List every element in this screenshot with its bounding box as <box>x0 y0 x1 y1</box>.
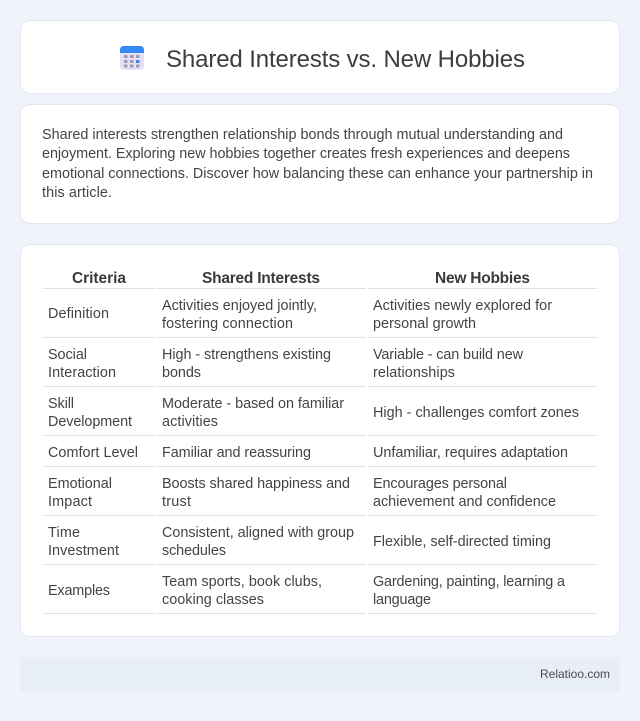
row: skill development: activities <box>162 414 218 430</box>
row: time investment: Time <box>48 525 80 541</box>
row: comfort level: Familiar and reassuring <box>162 445 311 461</box>
row: definition: Definition <box>48 306 109 322</box>
row: examples: Gardening, painting, learning a <box>373 574 565 590</box>
row: emotional impact: Boosts shared happiness and <box>162 476 350 492</box>
row: time investment: schedules <box>162 543 226 559</box>
row: social interaction: Social <box>48 347 87 363</box>
row: comfort level: Comfort Level <box>48 445 138 461</box>
row: emotional impact: Emotional <box>48 476 112 492</box>
row: skill development: Development <box>48 414 132 430</box>
text block: introduction: Shared interests strengthen relationship bonds through mutual understanding and <box>42 127 563 143</box>
table header: Criteria <box>72 270 126 287</box>
row: emotional impact: trust <box>162 494 191 510</box>
row: social interaction: bonds <box>162 365 201 381</box>
table header <box>72 270 530 287</box>
row: skill development <box>48 396 579 430</box>
footer <box>20 657 620 691</box>
title: Shared Interests vs. New Hobbies <box>166 46 525 73</box>
row: examples: cooking classes <box>162 592 264 608</box>
row: emotional impact: Impact <box>48 494 92 510</box>
text block: introduction <box>42 127 593 201</box>
row: time investment <box>48 525 551 559</box>
table header: New Hobbies <box>435 270 530 287</box>
footer: Relatioo.com <box>540 667 610 681</box>
row: definition: personal growth <box>373 316 476 332</box>
icon: calendar <box>120 46 144 70</box>
row: examples <box>48 574 565 608</box>
row: social interaction: High - strengthens existing <box>162 347 331 363</box>
row: social interaction: Variable - can build new <box>373 347 524 363</box>
row: time investment: Consistent, aligned with group <box>162 525 354 541</box>
row: definition <box>48 298 552 332</box>
panel: title card <box>20 20 620 94</box>
row: time investment: Investment <box>48 543 119 559</box>
row: social interaction <box>48 347 524 381</box>
row: definition: fostering connection <box>162 316 293 332</box>
row: skill development: Moderate - based on familiar <box>162 396 344 412</box>
row: examples: Team sports, book clubs, <box>162 574 322 590</box>
row: comfort level: Unfamiliar, requires adaptation <box>373 445 568 461</box>
row: definition: Activities newly explored for <box>373 298 552 314</box>
row: social interaction: relationships <box>373 365 455 381</box>
row: examples: language <box>373 592 431 608</box>
row: comfort level <box>48 445 568 461</box>
row: emotional impact: Encourages personal <box>373 476 507 492</box>
row: emotional impact: achievement and confidence <box>373 494 556 510</box>
row: emotional impact <box>48 476 556 510</box>
row: skill development: High - challenges comfort zones <box>373 405 579 421</box>
text block: introduction: enjoyment. Exploring new hobbies together creates fresh experiences and deepens <box>42 146 570 162</box>
row: examples: Examples <box>48 583 110 599</box>
row: skill development: Skill <box>48 396 74 412</box>
row: time investment: Flexible, self-directed timing <box>373 534 551 550</box>
text block: introduction: emotional connections. Discover how balancing these can enhance your partnership in <box>42 166 593 182</box>
table header: Shared Interests <box>202 270 320 287</box>
panel: comparison table <box>20 244 620 636</box>
panel: introduction <box>20 104 620 224</box>
text block: introduction: this article. <box>42 185 112 201</box>
row: social interaction: Interaction <box>48 365 116 381</box>
row: definition: Activities enjoyed jointly, <box>162 298 317 314</box>
